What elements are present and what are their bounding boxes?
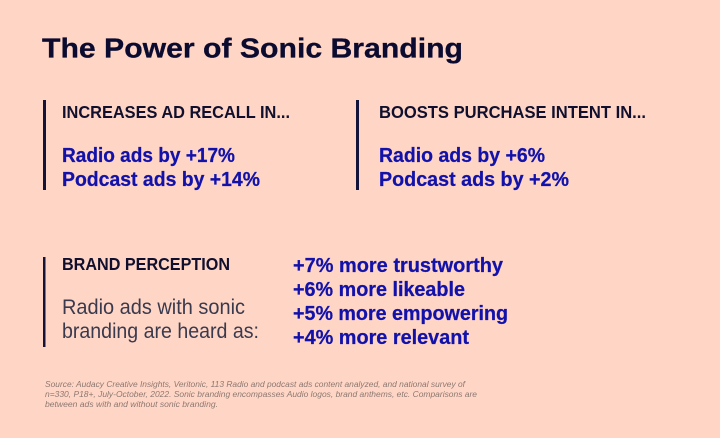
source footnote: between ads with and without sonic branding. <box>45 399 218 409</box>
panel accent bar: purchase intent <box>356 100 359 190</box>
stat: radio ad recall: Radio ads by +17% <box>62 144 235 167</box>
stat: podcast ad recall: Podcast ads by +14% <box>62 168 260 191</box>
heading: brand perception: BRAND PERCEPTION <box>62 254 230 274</box>
panel: ad recall <box>43 100 290 191</box>
title: The Power of Sonic Branding <box>42 32 463 64</box>
heading: purchase intent: BOOSTS PURCHASE INTENT IN... <box>379 102 646 122</box>
panel: purchase intent <box>356 100 646 191</box>
panel accent bar: brand perception <box>43 257 46 347</box>
source footnote: n=330, P18+, July-October, 2022. Sonic branding encompasses Audio logos, brand anthems, etc. Comparisons are <box>45 389 477 399</box>
stat: podcast purchase intent: Podcast ads by +2% <box>379 168 569 191</box>
stat list: perception results: +6% more likeable <box>293 278 465 301</box>
stat: radio purchase intent: Radio ads by +6% <box>379 144 545 167</box>
panel accent bar: ad recall <box>43 100 46 190</box>
stat list: perception results: +5% more empowering <box>293 302 508 325</box>
stat list: perception results: +4% more relevant <box>293 326 469 349</box>
text block: radio ads description <box>62 296 259 343</box>
text block: radio ads description: Radio ads with sonic <box>62 296 245 319</box>
source footnote <box>45 379 477 409</box>
heading: ad recall: INCREASES AD RECALL IN... <box>62 102 290 122</box>
panel: brand perception <box>43 254 508 349</box>
stat list: perception results <box>293 254 508 349</box>
stat list: perception results: +7% more trustworthy <box>293 254 504 277</box>
text block: radio ads description: branding are heard as: <box>62 320 259 343</box>
source footnote: Source: Audacy Creative Insights, Veritonic, 113 Radio and podcast ads content analyzed, and national survey of <box>45 379 467 389</box>
